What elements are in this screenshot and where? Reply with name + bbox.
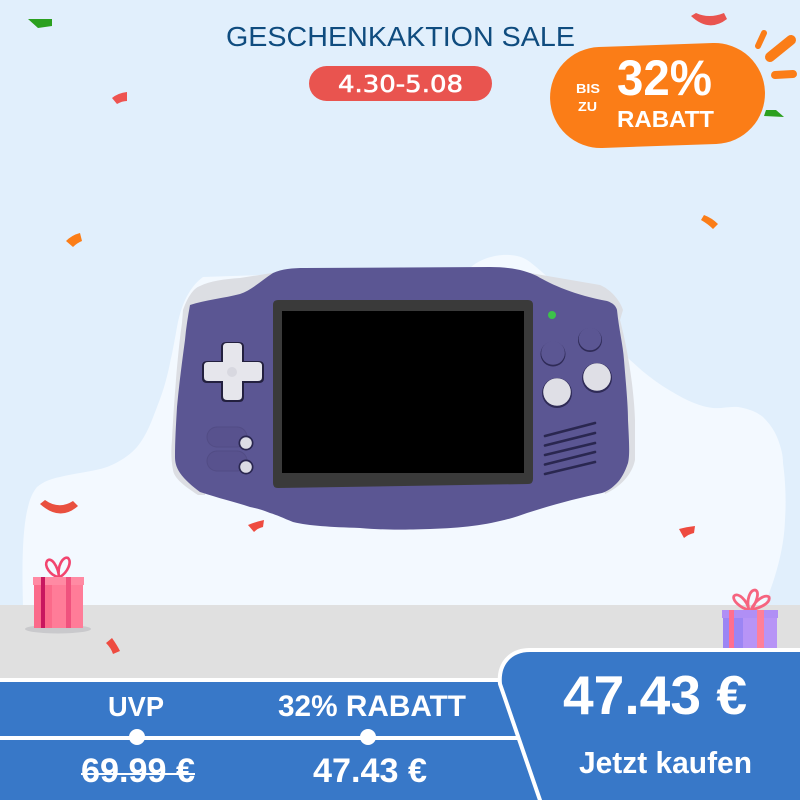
sale price: 47.43 € (563, 664, 747, 726)
date pill (309, 66, 492, 101)
console body (175, 267, 629, 530)
start and select switches (207, 427, 254, 474)
console screen bezel (273, 300, 533, 488)
buy label: Jetzt kaufen (579, 745, 752, 780)
discount badge: ZU (578, 99, 597, 114)
icon: badge sparkle rays (758, 33, 793, 75)
UVP timeline dot (129, 729, 145, 745)
console black screen (282, 311, 524, 473)
shoulder-colour buttons (540, 328, 602, 366)
price bar (0, 678, 545, 800)
discount timeline dot (360, 729, 376, 745)
confetti pieces (28, 13, 784, 654)
discount badge: 32% (617, 50, 712, 106)
date pill: 4.30-5.08 (338, 72, 463, 98)
handheld game console (171, 267, 635, 530)
icon: purple gift box (722, 590, 778, 649)
icon: d-pad (202, 342, 264, 402)
speaker grille (545, 423, 595, 474)
original price struck through: 69.99 € (81, 752, 195, 790)
power LED (548, 311, 556, 319)
UVP label: UVP (108, 691, 164, 722)
title: GESCHENKAKTION SALE (226, 21, 575, 52)
background cloud blob (23, 255, 786, 606)
buy panel (500, 650, 800, 800)
discounted price: 47.43 € (313, 752, 427, 790)
A and B buttons (542, 363, 612, 408)
console grey side shell (171, 273, 635, 495)
icon: pink gift box (25, 558, 91, 634)
discount badge: BIS (576, 81, 600, 96)
discount label: 32% RABATT (278, 690, 466, 723)
floor band (0, 605, 800, 681)
discount badge (548, 41, 767, 150)
discount badge: RABATT (617, 106, 715, 132)
